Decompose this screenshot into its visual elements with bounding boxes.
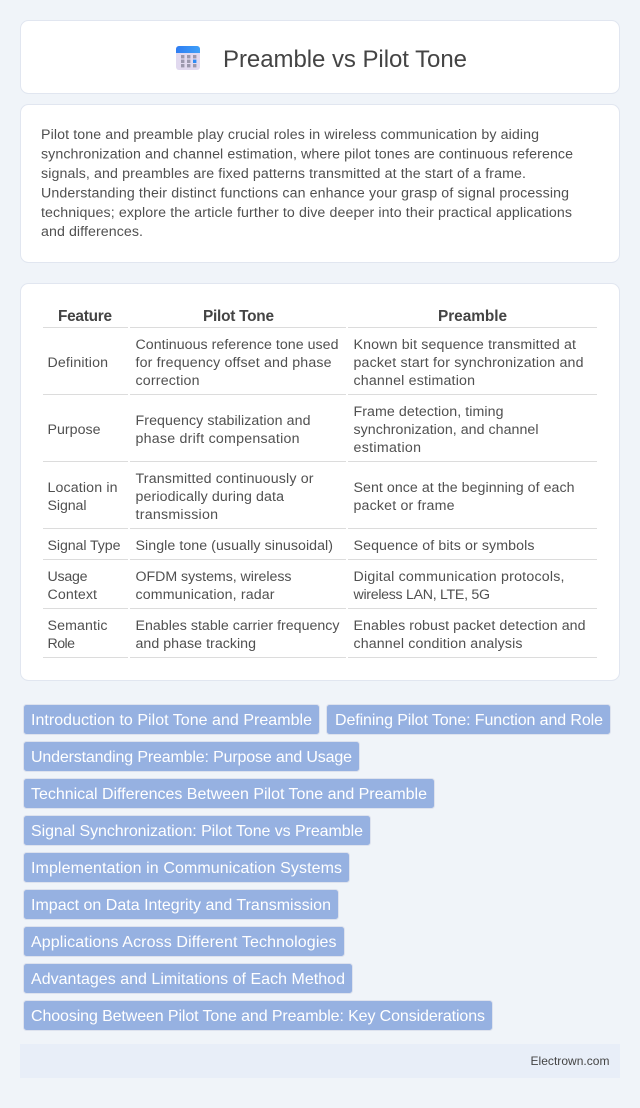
table header row — [58, 308, 507, 325]
row: semantic role: Semantic — [48, 618, 108, 634]
tag: technical differences: Technical Differences Between Pilot Tone and Preamble — [31, 786, 427, 803]
row: definition — [48, 337, 584, 389]
row: location in signal: periodically during data — [136, 489, 284, 505]
row: location in signal: transmission — [136, 507, 218, 523]
footer: Electrown.com — [530, 1054, 610, 1068]
row: signal type — [48, 538, 534, 554]
row: signal type: Single tone (usually sinusoidal) — [136, 538, 333, 554]
row: purpose: phase drift compensation — [136, 431, 300, 447]
row: purpose: synchronization, and channel — [354, 422, 538, 438]
row: purpose — [48, 404, 538, 456]
row: definition: Continuous reference tone used — [136, 337, 338, 353]
table header row: Pilot Tone — [203, 308, 274, 325]
tag: advantages and limitations — [24, 964, 352, 994]
tag: signal synchronization — [24, 816, 370, 846]
row: definition: Definition — [48, 355, 108, 371]
row: location in signal: Sent once at the beginning of each — [354, 480, 574, 496]
row: purpose: Frequency stabilization and — [136, 413, 310, 429]
row: signal type: Sequence of bits or symbols — [354, 538, 534, 554]
icon: calendar grid — [176, 46, 200, 70]
row: usage context — [48, 569, 564, 603]
tag: implementation — [24, 852, 350, 882]
title: Preamble vs Pilot Tone — [223, 46, 467, 73]
row: location in signal — [48, 471, 574, 523]
row: purpose: estimation — [354, 440, 421, 456]
panel: header — [20, 20, 620, 94]
panel: introduction — [20, 104, 620, 262]
row: usage context: communication, radar — [136, 587, 275, 603]
tag: choosing between: Choosing Between Pilot Tone and Preamble: Key Considerations — [31, 1008, 485, 1025]
row: semantic role: Enables robust packet detection and — [354, 618, 586, 634]
row: location in signal: Location in — [48, 480, 118, 496]
row: signal type: Signal Type — [48, 538, 121, 554]
tag: implementation: Implementation in Communication Systems — [31, 860, 342, 877]
table header row: Preamble — [438, 308, 507, 325]
tag: understanding preamble: Understanding Preamble: Purpose and Usage — [31, 749, 352, 766]
text block: introduction paragraph: Pilot tone and preamble play crucial roles in wireless communication by aiding — [41, 127, 539, 143]
row: usage context: Usage — [48, 569, 88, 585]
tag: understanding preamble — [24, 742, 360, 772]
row: usage context: OFDM systems, wireless — [136, 569, 292, 585]
row: definition: correction — [136, 373, 200, 389]
row: definition: for frequency offset and phase — [136, 355, 332, 371]
row: location in signal: Transmitted continuously or — [136, 471, 314, 487]
footer — [20, 1044, 620, 1078]
text block: introduction paragraph: and differences. — [41, 224, 143, 240]
row: definition: packet start for synchronization and — [354, 355, 584, 371]
row: usage context: Context — [48, 587, 97, 603]
row: location in signal: Signal — [48, 498, 86, 514]
row: purpose: Frame detection, timing — [354, 404, 504, 420]
tag: applications: Applications Across Different Technologies — [31, 934, 336, 951]
text block: introduction paragraph: signals, and preambles are fixed patterns transmitted at the start of a frame. — [41, 166, 526, 182]
row: semantic role — [48, 618, 586, 652]
row: semantic role: and phase tracking — [136, 636, 256, 652]
text block: introduction paragraph: techniques; explore the article further to dive deeper into their practical applications — [41, 205, 572, 221]
row: purpose: Purpose — [48, 422, 101, 438]
tag: technical differences — [24, 778, 434, 808]
tag: advantages and limitations: Advantages and Limitations of Each Method — [31, 971, 345, 988]
row: semantic role: Role — [48, 636, 75, 652]
row: semantic role: Enables stable carrier frequency — [136, 618, 340, 634]
tag: impact on data integrity — [24, 890, 338, 920]
tag: defining pilot tone: Defining Pilot Tone: Function and Role — [335, 712, 603, 729]
tag: introduction: Introduction to Pilot Tone and Preamble — [31, 712, 312, 729]
row: definition: Known bit sequence transmitted at — [354, 337, 576, 353]
tag: introduction — [24, 704, 320, 734]
panel: topic tags — [24, 704, 610, 1030]
row: usage context: Digital communication protocols, — [354, 569, 564, 585]
row: location in signal: packet or frame — [354, 498, 455, 514]
tag: signal synchronization: Signal Synchronization: Pilot Tone vs Preamble — [31, 823, 363, 840]
text block: introduction paragraph — [41, 127, 573, 240]
row: definition: channel estimation — [354, 373, 475, 389]
text block: introduction paragraph: synchronization and channel estimation, where pilot tones are continuous reference — [41, 146, 573, 162]
row: semantic role: channel condition analysis — [354, 636, 522, 652]
panel: comparison table — [20, 284, 620, 680]
text block: introduction paragraph: Understanding their distinct functions can enhance your grasp of signal processing — [41, 186, 569, 202]
row: usage context: wireless LAN, LTE, 5G — [352, 587, 490, 603]
tag: choosing between — [24, 1000, 492, 1030]
tag: applications — [24, 926, 344, 956]
tag: impact on data integrity: Impact on Data Integrity and Transmission — [31, 897, 331, 914]
tag: defining pilot tone — [326, 704, 610, 734]
table header row: Feature — [58, 308, 112, 325]
